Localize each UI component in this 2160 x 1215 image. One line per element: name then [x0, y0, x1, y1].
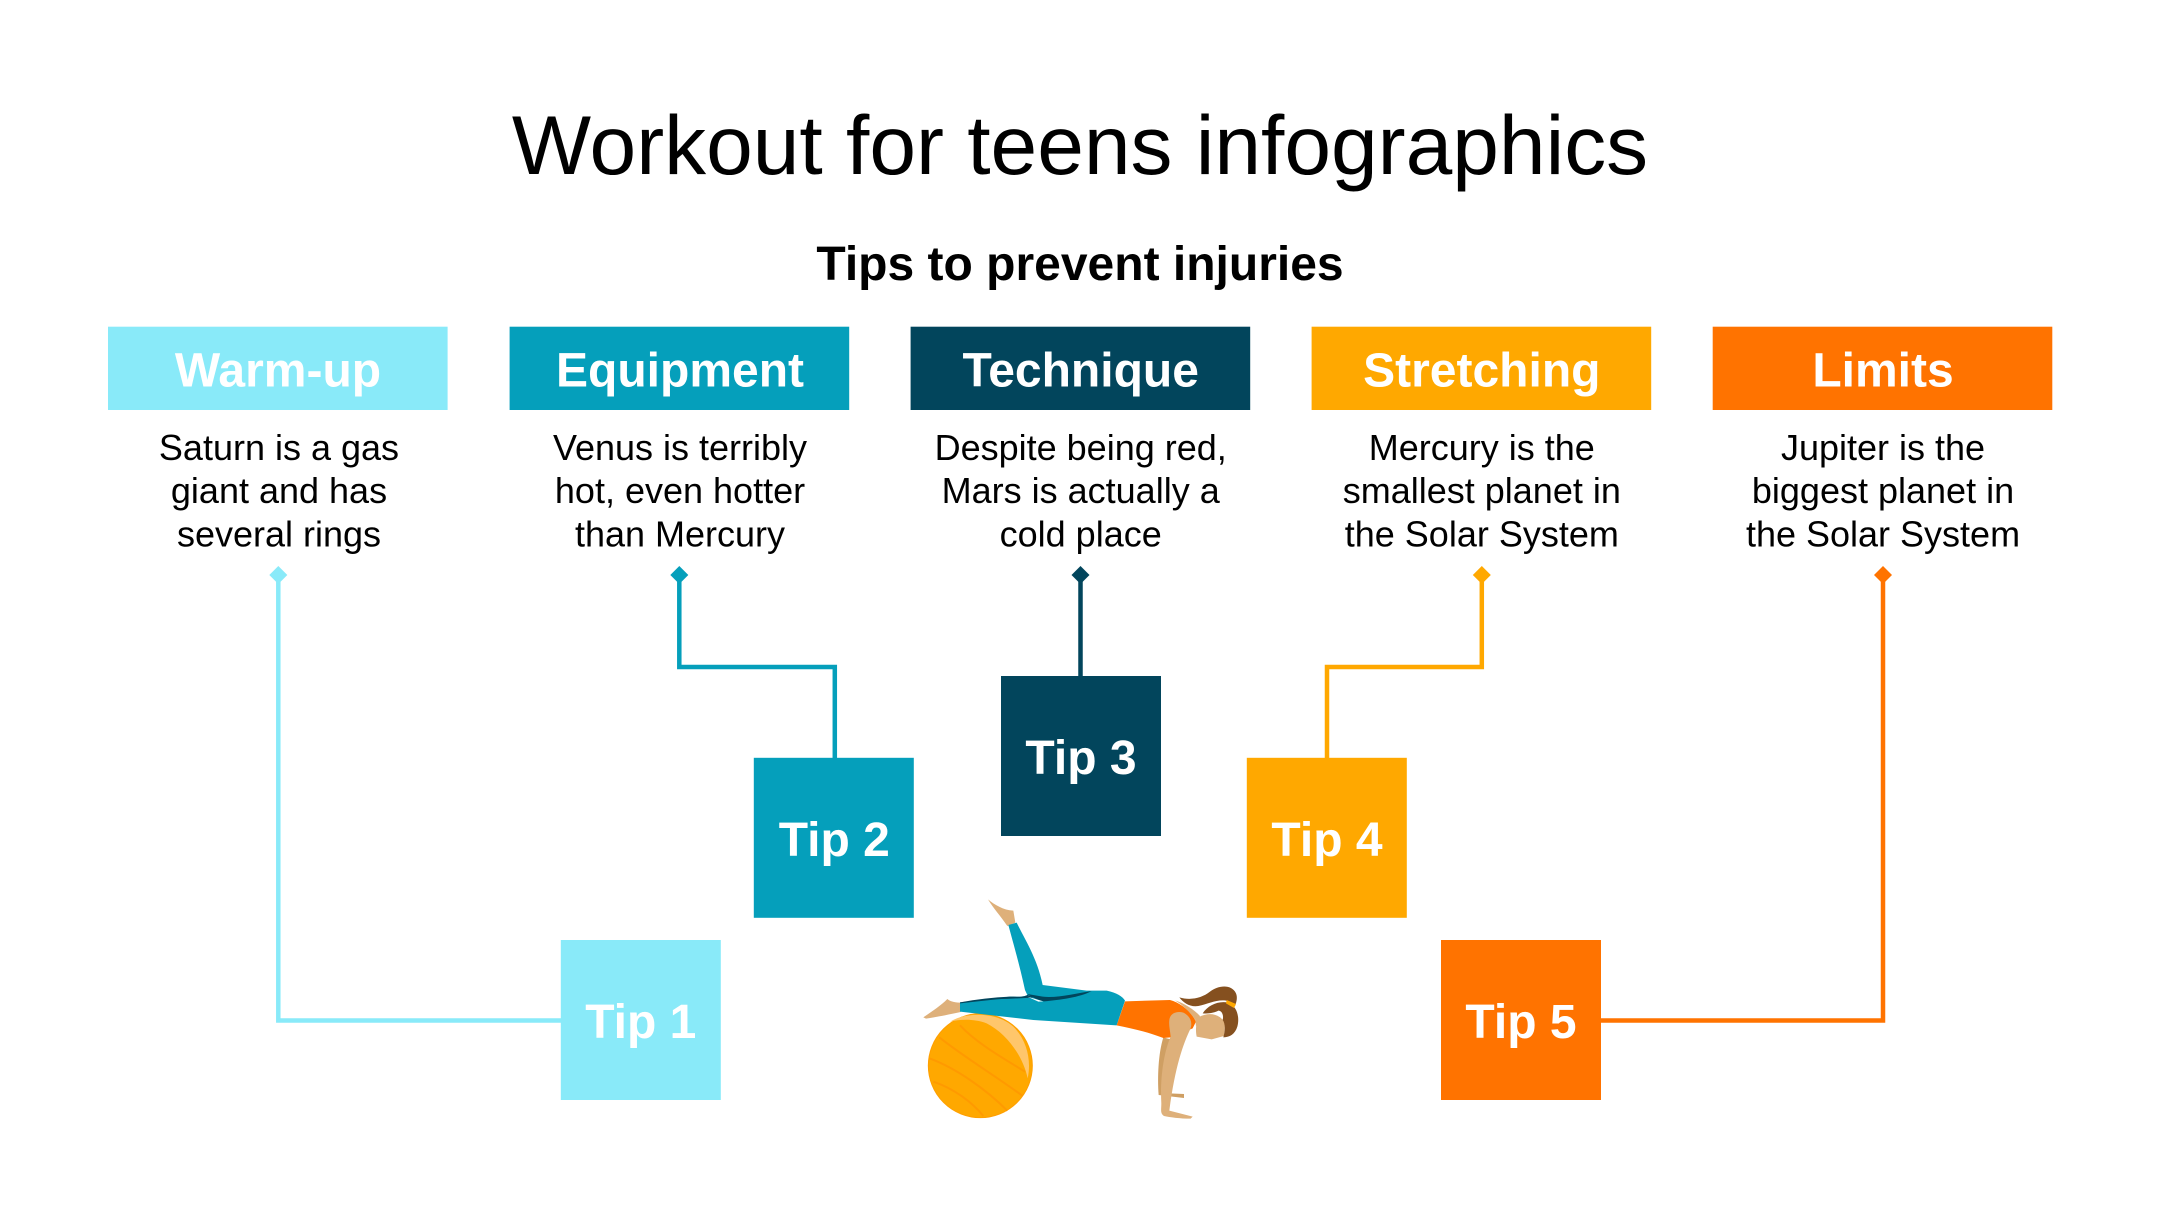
tip 3 box — [1001, 676, 1161, 836]
title: Workout for teens infographics — [512, 98, 1648, 192]
column: Limits: Limits — [1812, 344, 1954, 398]
connector: tip 5 — [1601, 566, 1892, 1020]
column: Technique: Mars is actually a — [942, 470, 1221, 511]
column: Warm-up — [108, 327, 448, 554]
tip 4 box — [1247, 758, 1407, 918]
column: Technique: cold place — [1000, 514, 1162, 554]
tip 3 box: Tip 3 — [1025, 732, 1137, 785]
column: Warm-up: giant and has — [171, 470, 387, 511]
raised foot — [988, 899, 1015, 926]
column: Stretching: Mercury is the — [1369, 427, 1595, 468]
head — [1196, 1014, 1225, 1039]
top — [1117, 1000, 1196, 1038]
hair band — [1226, 1000, 1236, 1008]
column: Equipment: hot, even hotter — [555, 470, 805, 511]
hair — [1203, 1002, 1238, 1037]
column: Technique: Technique — [962, 344, 1199, 398]
column: Limits — [1713, 327, 2052, 554]
near arm and neck — [1175, 1000, 1200, 1027]
column: Warm-up: Warm-up — [175, 344, 381, 398]
legs — [960, 923, 1125, 1025]
connector: tip 3 — [1072, 566, 1090, 677]
tip 1 box — [561, 940, 721, 1100]
column: Stretching — [1312, 327, 1651, 554]
ball — [928, 1014, 1032, 1118]
tip 5 box: Tip 5 — [1465, 996, 1577, 1049]
tip 1 box: Tip 1 — [585, 996, 696, 1049]
connector: tip 4 — [1327, 566, 1491, 758]
far arm — [1158, 1037, 1184, 1098]
illustration: woman exercising on ball — [923, 899, 1238, 1119]
column: Limits: the Solar System — [1746, 514, 2020, 554]
ponytail — [1179, 986, 1237, 1006]
column: Equipment: than Mercury — [575, 514, 785, 554]
column: Warm-up: Saturn is a gas — [159, 427, 399, 468]
column: Equipment: Equipment — [556, 344, 804, 398]
column: Stretching: the Solar System — [1345, 514, 1619, 554]
column: Equipment — [510, 327, 849, 554]
tip 2 box — [754, 758, 914, 918]
column: Equipment: Venus is terribly — [553, 427, 807, 468]
subtitle: Tips to prevent injuries — [816, 238, 1344, 291]
column: Limits: Jupiter is the — [1781, 427, 1985, 468]
connector: tip 2 — [670, 566, 835, 758]
column: Stretching: smallest planet in — [1343, 470, 1621, 511]
column: Technique — [911, 327, 1250, 554]
tip 2 box: Tip 2 — [779, 814, 890, 867]
lower foot — [923, 999, 961, 1019]
leg shadow — [960, 991, 1092, 1003]
column: Warm-up: several rings — [177, 514, 381, 554]
tip 4 box: Tip 4 — [1271, 814, 1383, 867]
column: Stretching: Stretching — [1363, 344, 1600, 398]
column: Technique: Despite being red, — [935, 427, 1227, 468]
tip 5 box — [1441, 940, 1601, 1100]
column: Limits: biggest planet in — [1752, 470, 2014, 511]
connector: tip 1 — [269, 566, 561, 1020]
white gap — [1027, 997, 1043, 1002]
